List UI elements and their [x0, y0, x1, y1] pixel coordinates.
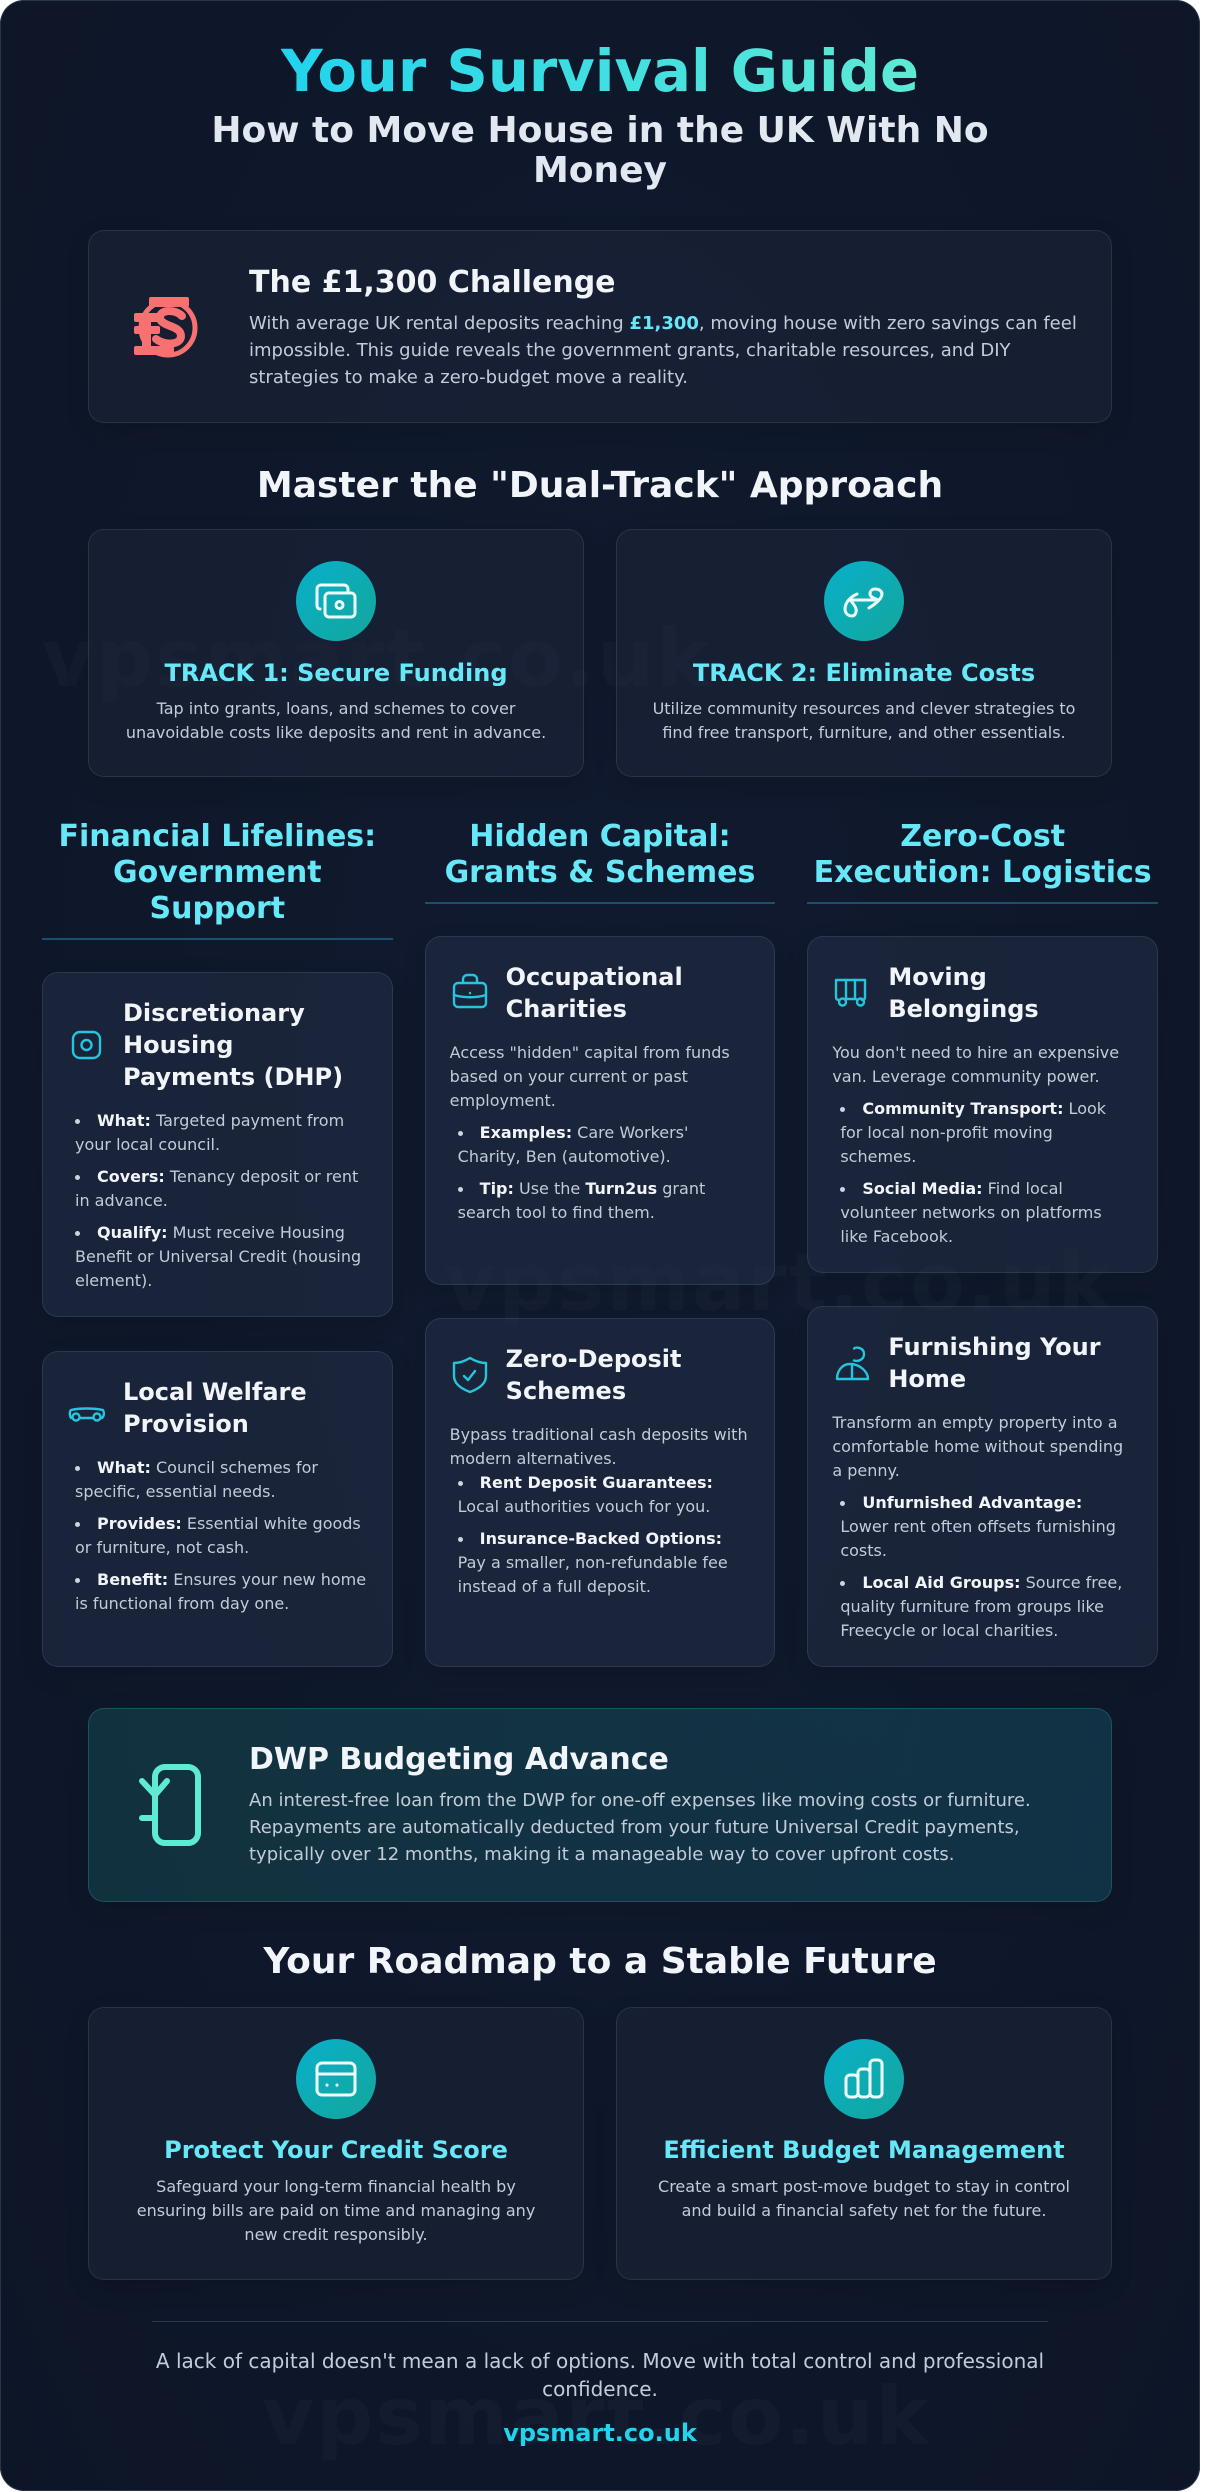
bullet list: What: Council schemes for [97, 1458, 318, 1477]
bullet list: Community Transport: Look [862, 1099, 1106, 1118]
bullet list: Covers: Tenancy deposit or rent [97, 1167, 358, 1186]
panel: budget management [616, 2007, 1112, 2280]
card header [72, 999, 343, 1091]
column heading: hidden capital: Grants & Schemes [445, 855, 755, 890]
bullet list [458, 1123, 705, 1222]
body text [249, 313, 1077, 388]
card header: Payments (DHP) [123, 1063, 343, 1091]
icon: looped arrows [824, 561, 904, 641]
subtitle: How to Move House in the UK With No [211, 110, 989, 151]
bullet list [75, 1111, 361, 1290]
panel: track 2 [616, 529, 1112, 777]
bullet list: What: Targeted payment from [97, 1111, 344, 1130]
bullet list: Examples: Care Workers' [480, 1123, 688, 1142]
intro text: You don't need to hire an expensive [832, 1043, 1119, 1062]
heading: roadmap: Your Roadmap to a Stable Future [263, 1941, 937, 1982]
body text [653, 699, 1075, 742]
card header: Belongings [888, 995, 1039, 1023]
bullet list: in advance. [75, 1191, 168, 1210]
bullet list: Charity, Ben (automotive). [458, 1147, 671, 1166]
bullet list: Unfurnished Advantage: [862, 1493, 1082, 1512]
bullet list: costs. [840, 1541, 887, 1560]
watermark: bottom: vpsmart.co.uk [262, 2370, 931, 2463]
icon: banknotes [296, 561, 376, 641]
bullet list: Local authorities vouch for you. [458, 1497, 710, 1516]
intro text: employment. [450, 1091, 556, 1110]
card header: Housing [123, 1031, 233, 1059]
body text: find free transport, furniture, and other essentials. [662, 723, 1066, 742]
panel: furnishing your home [807, 1306, 1158, 1667]
card header: Furnishing Your [888, 1333, 1101, 1361]
body text: Safeguard your long-term financial health by [156, 2177, 516, 2196]
bullet list: Benefit: Ensures your new home [97, 1570, 366, 1589]
footer message [156, 2349, 1044, 2400]
bullet list: Local Aid Groups: Source free, [862, 1573, 1122, 1592]
bullet list: Social Media: Find local [862, 1179, 1063, 1198]
bullet list: Insurance-Backed Options: [480, 1529, 722, 1548]
body text: unavoidable costs like deposits and rent in advance. [126, 723, 546, 742]
body text: new credit responsibly. [244, 2225, 428, 2244]
panel: credit score [88, 2007, 584, 2280]
bullet list: your local council. [75, 1135, 220, 1154]
intro text: Transform an empty property into a [832, 1413, 1118, 1432]
body text: Utilize community resources and clever strategies to [653, 699, 1075, 718]
bullet list: Benefit or Universal Credit (housing [75, 1247, 361, 1266]
intro text: a penny. [832, 1461, 900, 1480]
body text: Repayments are automatically deducted from your future Universal Credit payments, [249, 1817, 1020, 1838]
column heading: financial lifelines: Financial Lifelines: [58, 819, 376, 854]
bullet list: element). [75, 1271, 152, 1290]
watermark: top: vpsmart.co.uk [42, 612, 711, 705]
body text: Create a smart post-move budget to stay in control [658, 2177, 1070, 2196]
panel: occupational charities [425, 936, 775, 1285]
icon: credit card [296, 2039, 376, 2119]
heading: TRACK 2: Eliminate Costs [693, 659, 1035, 687]
card header: Moving [888, 963, 987, 991]
column heading: hidden capital: Hidden Capital: [469, 819, 731, 854]
footer message: confidence. [542, 2376, 658, 2400]
body text: ensuring bills are paid on time and managing any [137, 2201, 535, 2220]
watermark: middle: vpsmart.co.uk [444, 1236, 1113, 1329]
intro text [450, 1043, 730, 1110]
body text [137, 2177, 535, 2244]
bullet list: Provides: Essential white goods [97, 1514, 361, 1533]
body text: typically over 12 months, making it a manageable way to cover upfront costs. [249, 1844, 954, 1865]
intro text [450, 1425, 748, 1468]
card header: Charities [506, 995, 627, 1023]
card header [834, 963, 1039, 1023]
intro text: modern alternatives. [450, 1449, 617, 1468]
body text: strategies to make a zero-budget move a reality. [249, 367, 688, 388]
card header: Occupational [506, 963, 683, 991]
icon: bar chart [824, 2039, 904, 2119]
panel: DWP budgeting advance [88, 1708, 1112, 1902]
panel: the £1,300 challenge [88, 230, 1112, 423]
column heading: hidden capital [445, 819, 755, 890]
heading: dual track: Master the "Dual-Track" Approach [257, 465, 943, 506]
panel: local welfare provision [42, 1351, 393, 1667]
card header [452, 1345, 681, 1405]
bullet list [840, 1493, 1122, 1640]
heading: Protect Your Credit Score [164, 2136, 508, 2164]
column heading: financial lifelines: Support [149, 891, 285, 926]
bullet list: search tool to find them. [458, 1203, 655, 1222]
bullet list: Tip: Use the Turn2us grant [480, 1179, 705, 1198]
bullet list [458, 1473, 728, 1596]
column heading: financial lifelines: Government [113, 855, 322, 890]
bullet list: volunteer networks on platforms [840, 1203, 1102, 1222]
bullet list [840, 1099, 1106, 1246]
body text [126, 699, 546, 742]
body text: With average UK rental deposits reaching £1,300, moving house with zero savings can feel [249, 313, 1077, 334]
body text [249, 1790, 1031, 1865]
heading: DWP Budgeting Advance [249, 1742, 669, 1777]
title: Your Survival Guide [281, 38, 919, 105]
footer link: vpsmart.co.uk [503, 2419, 697, 2447]
footer message: A lack of capital doesn't mean a lack of options. Move with total control and professional [156, 2349, 1044, 2373]
bullet list: Lower rent often offsets furnishing [840, 1517, 1116, 1536]
card header: Discretionary [123, 999, 305, 1027]
card header [452, 963, 683, 1023]
bullet list: Freecycle or local charities. [840, 1621, 1058, 1640]
card header: Schemes [506, 1377, 626, 1405]
card header [68, 1378, 307, 1438]
bullet list: instead of a full deposit. [458, 1577, 651, 1596]
body text: and build a financial safety net for the future. [682, 2201, 1046, 2220]
column heading: zero cost: Execution: Logistics [814, 855, 1152, 890]
intro text [832, 1043, 1119, 1086]
card header: Local Welfare [123, 1378, 307, 1406]
panel: track 1 [88, 529, 584, 777]
bullet list: Rent Deposit Guarantees: [480, 1473, 713, 1492]
panel: zero-deposit schemes [425, 1318, 775, 1667]
column heading: zero cost: Zero-Cost [900, 819, 1065, 854]
bullet list [75, 1458, 366, 1613]
card header [836, 1333, 1101, 1393]
card header: Provision [123, 1410, 249, 1438]
column heading: financial lifelines [58, 819, 376, 926]
bullet list: Pay a smaller, non-refundable fee [458, 1553, 728, 1572]
column heading: zero cost [814, 819, 1152, 890]
intro text: comfortable home without spending [832, 1437, 1123, 1456]
intro text: based on your current or past [450, 1067, 688, 1086]
bullet list: specific, essential needs. [75, 1482, 276, 1501]
panel: discretionary housing payments [42, 972, 393, 1317]
bullet list: for local non-profit moving [840, 1123, 1053, 1142]
body text [658, 2177, 1070, 2220]
bullet list: schemes. [840, 1147, 916, 1166]
bullet list: is functional from day one. [75, 1594, 289, 1613]
subtitle: Money [533, 150, 667, 191]
bullet list: quality furniture from groups like [840, 1597, 1104, 1616]
icon: phone with branch [139, 1764, 201, 1846]
heading: The £1,300 Challenge [249, 265, 616, 300]
intro text: Bypass traditional cash deposits with [450, 1425, 748, 1444]
heading: TRACK 1: Secure Funding [164, 659, 508, 687]
body text: An interest-free loan from the DWP for one-off expenses like moving costs or furniture. [249, 1790, 1031, 1811]
card header: Zero-Deposit [506, 1345, 681, 1373]
intro text: van. Leverage community power. [832, 1067, 1100, 1086]
body text: Tap into grants, loans, and schemes to cover [157, 699, 515, 718]
intro text [832, 1413, 1123, 1480]
subtitle [211, 110, 989, 191]
panel: moving belongings [807, 936, 1158, 1273]
heading: Efficient Budget Management [663, 2136, 1065, 2164]
icon: coral money symbol [134, 297, 198, 358]
bullet list: Qualify: Must receive Housing [97, 1223, 345, 1242]
intro text: Access "hidden" capital from funds [450, 1043, 730, 1062]
body text: impossible. This guide reveals the government grants, charitable resources, and DIY [249, 340, 1011, 361]
bullet list: or furniture, not cash. [75, 1538, 249, 1557]
bullet list: like Facebook. [840, 1227, 953, 1246]
card header: Home [888, 1365, 966, 1393]
